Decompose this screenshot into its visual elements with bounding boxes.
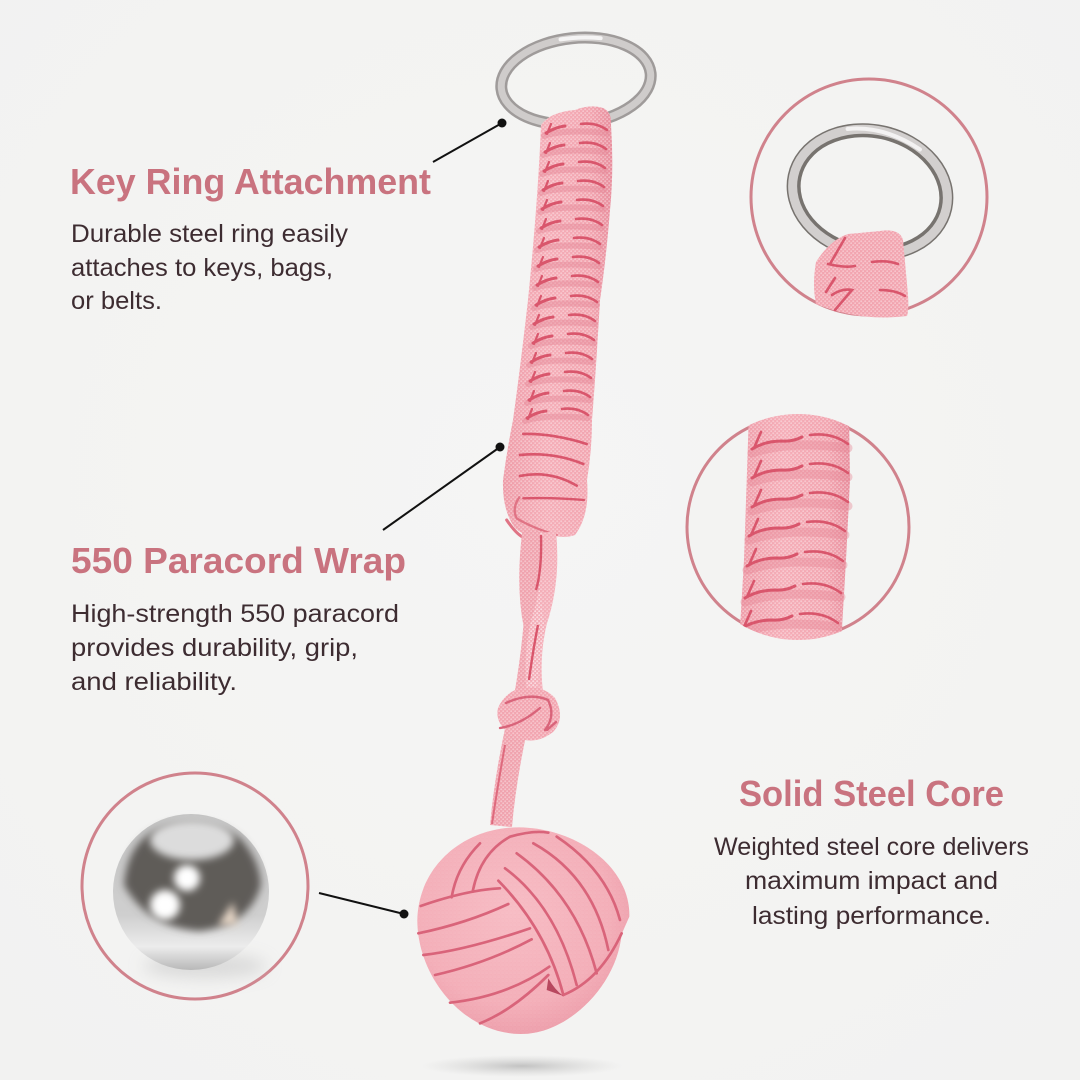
cord strands — [492, 530, 549, 826]
paracord wrap — [503, 106, 612, 538]
callout line: key ring — [433, 118, 506, 162]
callout line: paracord — [383, 442, 504, 530]
text: paracord description: and reliability. — [71, 668, 237, 696]
heading: 550 paracord wrap: 550 Paracord Wrap — [71, 540, 406, 581]
callout line: steel core — [319, 893, 408, 918]
small knot — [497, 687, 560, 741]
monkey fist ball — [417, 827, 629, 1034]
text: paracord description: provides durability, grip, — [71, 634, 358, 662]
text: paracord description: High-strength 550 paracord — [71, 600, 399, 628]
heading: solid steel core: Solid Steel Core — [739, 773, 1004, 814]
panel: paracord detail — [687, 412, 909, 645]
text: steel core description — [714, 833, 1029, 930]
text: key ring description: or belts. — [71, 287, 162, 315]
panel: key ring detail — [751, 79, 987, 318]
panel: steel ball detail — [82, 773, 308, 999]
ground shadow — [422, 1055, 622, 1077]
text: key ring description: attaches to keys, bags, — [71, 254, 333, 282]
text: key ring description — [71, 220, 349, 315]
text: steel core description: maximum impact and — [745, 867, 998, 895]
text: paracord description — [71, 600, 399, 696]
heading: key ring attachment: Key Ring Attachment — [70, 161, 431, 202]
text: steel core description: lasting performance. — [752, 902, 991, 930]
key ring — [497, 30, 655, 132]
text: key ring description: Durable steel ring easily — [71, 220, 349, 248]
text: steel core description: Weighted steel core delivers — [714, 833, 1029, 861]
